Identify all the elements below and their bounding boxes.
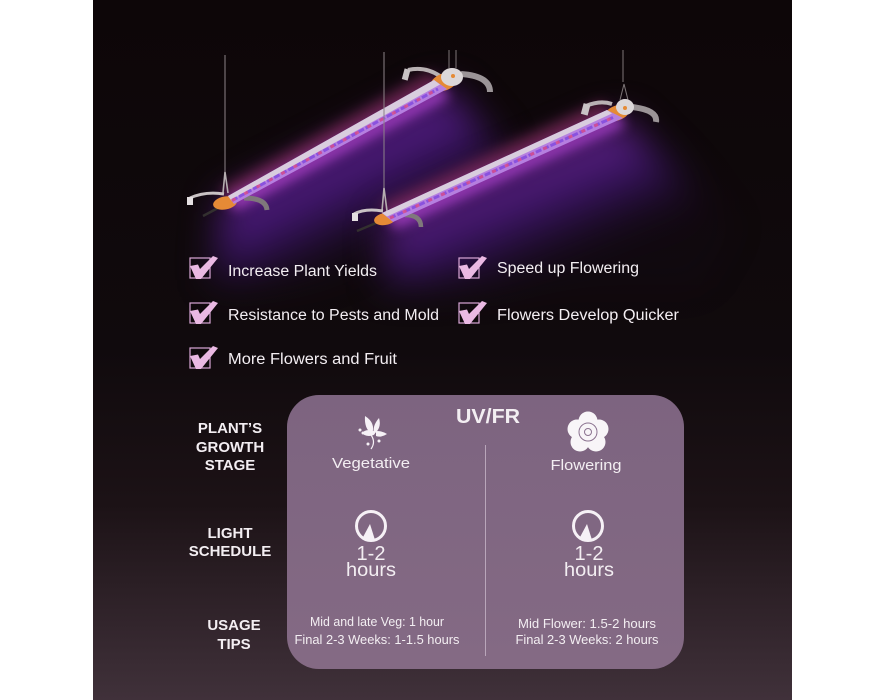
benefit: Increase Plant Yields [190, 256, 377, 280]
row heading: usage tips [207, 617, 261, 653]
row heading: light schedule [189, 525, 271, 560]
label: Vegetative: Vegetative [332, 455, 410, 472]
icon: clock flowering [574, 512, 602, 540]
benefit: Resistance to Pests and Mold [190, 301, 439, 324]
panel title: UV/FR [456, 406, 521, 428]
row heading: light schedule: LIGHT [208, 525, 252, 542]
schedule: flowering: 1-2 [575, 543, 603, 565]
light glow: second lamp [385, 110, 735, 285]
schedule: vegetative [346, 543, 396, 581]
row heading: plant's growth stage [196, 420, 264, 474]
row heading: usage tips: TIPS [217, 636, 251, 653]
row heading: plant's growth stage: PLANT’S [198, 420, 262, 437]
icon: vegetative sprig [358, 416, 387, 449]
schedule: flowering [564, 543, 614, 581]
icon: clock vegetative [356, 512, 386, 540]
benefit: More Flowers and Fruit [190, 346, 398, 369]
benefit: Speed up Flowering [459, 256, 639, 279]
light glow: first lamp [215, 80, 505, 280]
tips: flowering: Mid Flower: 1.5-2 hours [518, 617, 656, 631]
benefit: Speed up Flowering: Speed up Flowering [497, 260, 639, 277]
schedule: flowering: hours [564, 560, 614, 581]
panel: UV/FR table [287, 395, 684, 669]
lamp: second [352, 50, 656, 231]
lamp: first [187, 50, 490, 216]
benefit: More Flowers and Fruit: More Flowers and Fruit [228, 351, 398, 368]
row heading: light schedule: SCHEDULE [189, 543, 271, 560]
column divider [484, 445, 486, 656]
schedule: vegetative: 1-2 [357, 543, 385, 565]
benefit: Resistance to Pests and Mold: Resistance to Pests and Mold [228, 307, 439, 324]
schedule: vegetative: hours [346, 560, 396, 581]
benefit: Flowers Develop Quicker: Flowers Develop Quicker [497, 307, 679, 324]
icon: flower [568, 412, 608, 452]
benefit: Flowers Develop Quicker [459, 301, 679, 324]
row heading: plant's growth stage: STAGE [205, 457, 255, 474]
row heading: usage tips: USAGE [207, 617, 261, 634]
tips: flowering [516, 617, 658, 647]
tips: vegetative: Final 2-3 Weeks: 1-1.5 hours [294, 633, 460, 647]
label: Flowering: Flowering [550, 457, 622, 474]
tips: vegetative: Mid and late Veg: 1 hour [310, 615, 444, 629]
tips: flowering: Final 2-3 Weeks: 2 hours [516, 633, 658, 647]
dark background [93, 0, 792, 700]
tips: vegetative [294, 615, 460, 647]
benefit: Increase Plant Yields: Increase Plant Yields [228, 263, 377, 280]
row heading: plant's growth stage: GROWTH [196, 439, 264, 456]
